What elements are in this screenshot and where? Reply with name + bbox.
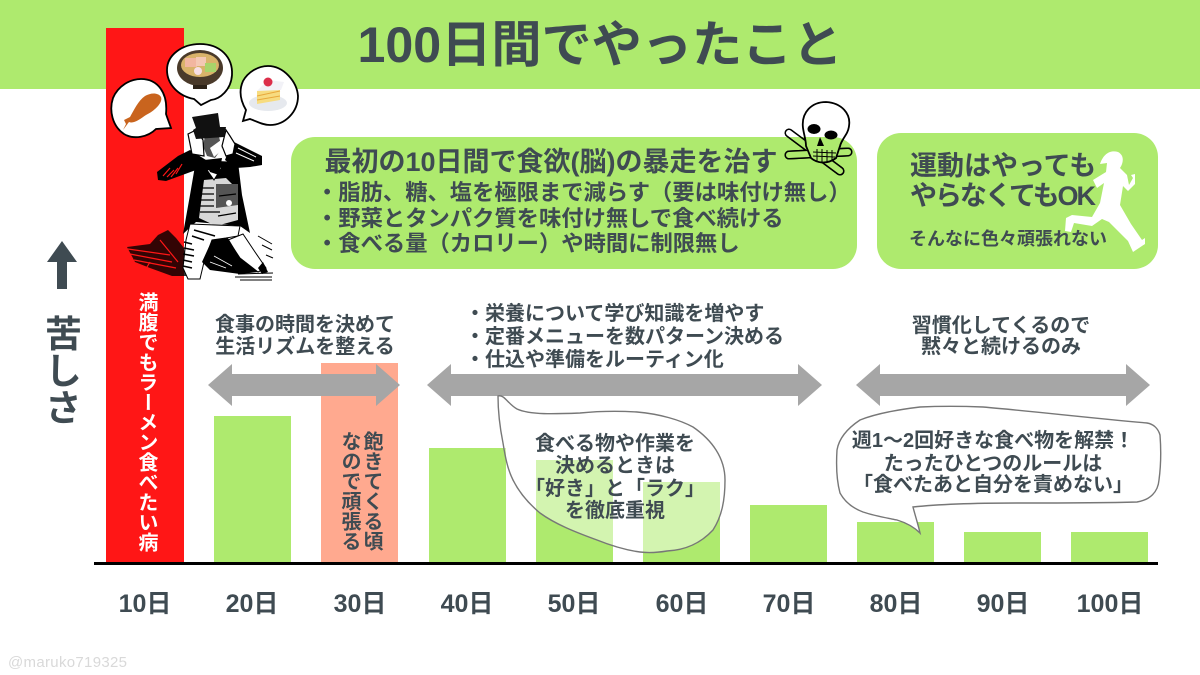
axis line bbox=[94, 562, 1158, 565]
y axis label: 苦しさ bbox=[40, 314, 80, 426]
x axis labels: 100日 bbox=[1077, 590, 1143, 618]
icon: ramen bowl bbox=[177, 50, 223, 89]
face bbox=[203, 133, 222, 158]
icon: cake bbox=[249, 78, 287, 111]
panel: exercise: やらなくてもOK bbox=[910, 181, 1096, 211]
hat bbox=[192, 113, 226, 139]
x axis labels: 90日 bbox=[977, 590, 1029, 618]
icon: chicken leg bbox=[123, 94, 161, 130]
phase text: 80-100 days: 習慣化してくるので bbox=[912, 314, 1090, 337]
waistcoat and shirt bbox=[199, 178, 238, 226]
x axis labels: 10日 bbox=[119, 590, 171, 618]
panel bullets: ・野菜とタンパク質を味付け無しで食べ続ける bbox=[316, 206, 784, 231]
exercise note: そんなに色々頑張れない bbox=[909, 228, 1107, 249]
hands bbox=[188, 130, 204, 156]
bar: 100 days bbox=[1071, 532, 1148, 563]
phase text: 40-70 days bbox=[465, 302, 784, 371]
bar: 10 days bbox=[106, 28, 184, 563]
bubble: ramen bbox=[167, 44, 232, 105]
bar: 50 days bbox=[536, 460, 613, 563]
x axis labels bbox=[119, 590, 1143, 618]
phase text: 20-30 days: 食事の時間を決めて bbox=[215, 313, 395, 336]
icon: skull and crossbones bbox=[789, 102, 849, 171]
arrow: 20-30 days bbox=[208, 364, 400, 406]
x axis labels: 30日 bbox=[334, 590, 386, 618]
arrow: 40-70 days bbox=[427, 364, 822, 406]
panel bullets: ・脂肪、糖、塩を極限まで減らす（要は味付け無し） bbox=[316, 180, 851, 205]
phase text: 40-70 days: ・仕込や準備をルーティン化 bbox=[465, 348, 724, 371]
panel bullets bbox=[316, 180, 851, 256]
icon: runner bbox=[1065, 151, 1145, 252]
callout: weekly reward: 「食べたあと自分を責めない」 bbox=[853, 473, 1133, 496]
callout: likes and easy: 「好き」と「ラク」 bbox=[525, 477, 705, 500]
bubble: chicken bbox=[111, 79, 171, 137]
callout: likes and easy: を徹底重視 bbox=[565, 499, 665, 522]
callout: likes and easy: 食べる物や作業を bbox=[535, 432, 695, 455]
x axis labels: 80日 bbox=[870, 590, 922, 618]
inside-panel layer bbox=[784, 137, 852, 176]
callout: weekly reward bbox=[837, 406, 1161, 533]
bubble: cake bbox=[241, 66, 298, 125]
phase text: 20-30 days: 生活リズムを整える bbox=[215, 334, 395, 358]
ground lines bbox=[235, 236, 273, 280]
x axis labels: 50日 bbox=[548, 590, 600, 618]
coat bbox=[183, 160, 250, 234]
legs shadow bbox=[202, 238, 258, 274]
panel heading: 最初の10日間で食欲(脳)の暴走を治す bbox=[324, 147, 778, 177]
phase text: 80-100 days: 黙々と続けるのみ bbox=[921, 334, 1081, 358]
phase text: 40-70 days: ・栄養について学び知識を増やす bbox=[465, 302, 764, 325]
x axis labels: 60日 bbox=[656, 590, 708, 618]
x axis labels: 70日 bbox=[763, 590, 815, 618]
arrow: 80-100 days bbox=[856, 364, 1150, 406]
figure: kneeling man holding head bbox=[127, 113, 273, 280]
exercise heading: 運動はやっても bbox=[910, 151, 1096, 181]
arms bbox=[157, 150, 206, 181]
salmon bar vertical text: 飽きてくる頃 bbox=[360, 431, 383, 551]
phase text: 80-100 days bbox=[912, 314, 1090, 358]
header band bbox=[0, 0, 1200, 89]
phase text: 20-30 days bbox=[215, 313, 395, 358]
bar chart bbox=[94, 28, 1158, 565]
shadow bbox=[127, 230, 188, 276]
panel: exercise bbox=[877, 133, 1158, 269]
trousers bbox=[183, 224, 240, 279]
outside-panel layer bbox=[789, 102, 849, 171]
title: 100日間でやったこと bbox=[358, 17, 842, 73]
callout: weekly reward: 週1～2回好きな食べ物を解禁！ bbox=[852, 429, 1134, 452]
salmon bar vertical text: なので頑張る bbox=[338, 431, 361, 551]
bar: 60 days bbox=[643, 482, 720, 563]
credit: @maruko719325 bbox=[8, 654, 127, 671]
neck scarf bbox=[204, 158, 222, 175]
bar: 90 days bbox=[964, 532, 1041, 563]
salmon bar vertical text bbox=[338, 431, 383, 551]
callout: likes and easy: 決めるときは bbox=[555, 454, 675, 477]
red bar vertical text: 満腹でもラーメン食べたい病 bbox=[135, 292, 158, 553]
bar: 80 days bbox=[857, 522, 934, 563]
y axis: up arrow bbox=[47, 241, 77, 289]
phase text: 40-70 days: ・定番メニューを数パターン決める bbox=[465, 325, 784, 348]
x axis labels: 20日 bbox=[226, 590, 278, 618]
bar: 70 days bbox=[750, 505, 827, 563]
callout: likes and easy bbox=[498, 396, 725, 553]
bar: 20 days bbox=[214, 416, 291, 563]
panel: first 10 days bbox=[291, 137, 857, 269]
panel bullets: ・食べる量（カロリー）や時間に制限無し bbox=[316, 231, 740, 256]
x axis labels: 40日 bbox=[441, 590, 493, 618]
bar: 40 days bbox=[429, 448, 506, 563]
bar: 30 days bbox=[321, 363, 398, 563]
callout: weekly reward: たったひとつのルールは bbox=[884, 453, 1102, 475]
